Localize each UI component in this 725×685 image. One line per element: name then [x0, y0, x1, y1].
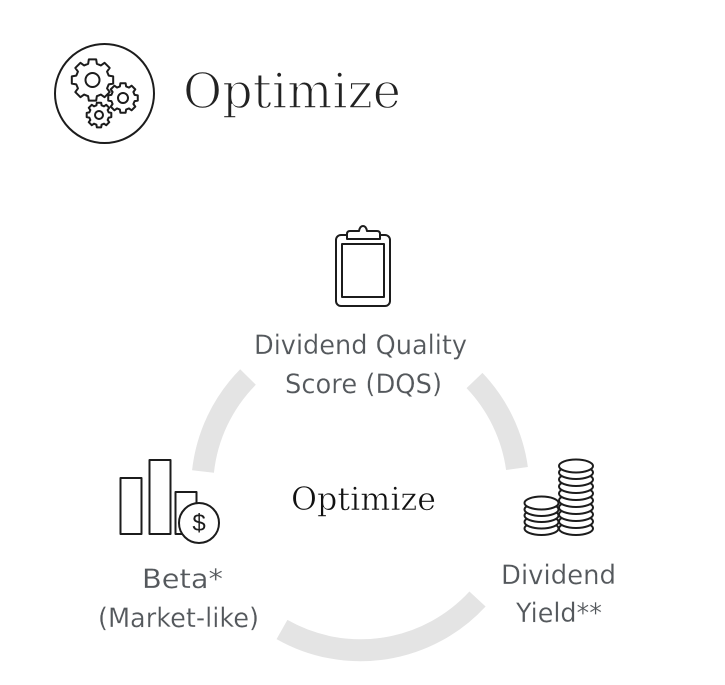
icon: clipboard: [336, 226, 390, 306]
icon: gears in circle: [55, 44, 154, 143]
label: Dividend Yield: [501, 560, 616, 629]
icon: bar chart with dollar coin: [120, 460, 219, 543]
label: Dividend Quality Score: Score (DQS): [285, 369, 442, 400]
label: Dividend Yield: Dividend: [501, 560, 616, 591]
label: Dividend Quality Score: Dividend Quality: [254, 330, 467, 361]
label: Beta: [98, 564, 259, 634]
icon: bar chart with dollar coin: $: [192, 510, 206, 537]
center label: Optimize: [291, 480, 436, 518]
label: Dividend Quality Score: [254, 330, 467, 400]
label: Beta: Beta*: [142, 564, 223, 595]
label: Dividend Yield: Yield**: [515, 598, 602, 629]
title: Optimize: [183, 63, 401, 120]
label: Beta: (Market-like): [98, 603, 259, 634]
icon: coin stacks: [524, 460, 593, 535]
cycle ring: [203, 377, 517, 650]
